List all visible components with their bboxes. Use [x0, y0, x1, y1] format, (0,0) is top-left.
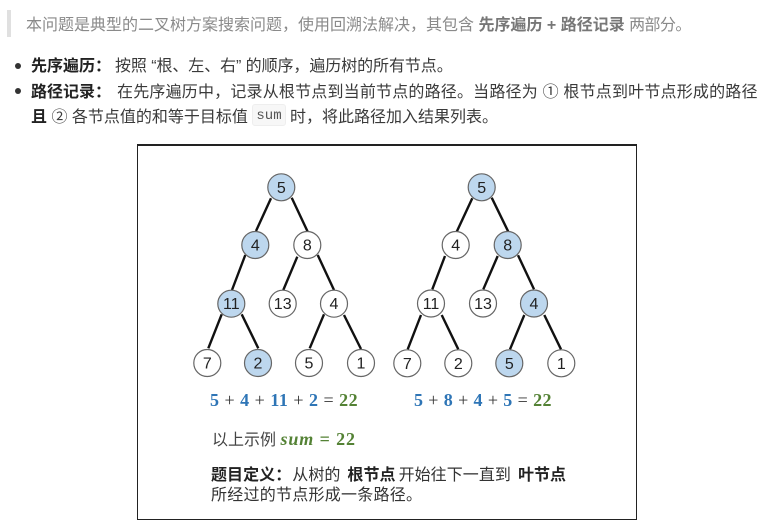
- bullet: preorder: 按照 “根、左、右” 的顺序，遍历树的所有节点。: [115, 58, 453, 75]
- quote bar: [7, 10, 11, 37]
- left tree: 13: [274, 296, 292, 313]
- right tree: 1: [557, 356, 566, 373]
- right tree: 4: [530, 296, 539, 313]
- left tree: 5: [305, 356, 314, 372]
- left tree: 2: [254, 356, 263, 372]
- equation right: 5 + 8 + 4 + 5 = 22: [414, 390, 552, 410]
- right tree: 7: [403, 356, 412, 373]
- right tree: 4: [451, 238, 460, 254]
- bullet: path record: sum: [256, 108, 282, 124]
- right tree: 8: [503, 238, 512, 254]
- definition: 题目定义：从树的 根节点开始往下一直到 叶节点: [211, 467, 566, 484]
- equation left: 5 + 4 + 11 + 2 = 22: [210, 390, 358, 410]
- definition: 所经过的节点形成一条路径。: [211, 487, 422, 504]
- right tree: 5: [477, 180, 486, 197]
- right tree: 5: [505, 356, 514, 373]
- right tree: 11: [423, 296, 439, 313]
- left tree: 4: [251, 238, 260, 254]
- left tree: 7: [203, 356, 212, 372]
- left tree: [194, 174, 374, 376]
- bullet: path record: 在先序遍历中，记录从根节点到当前节点的路径。当路径为 ① 根节点到叶节点形成的路径: [117, 84, 758, 101]
- left tree: 4: [330, 296, 339, 313]
- left tree: 1: [357, 356, 366, 372]
- bullet: path record: [15, 83, 758, 126]
- left tree: 8: [303, 238, 312, 254]
- left tree: 11: [223, 296, 240, 313]
- right tree: 13: [474, 296, 492, 313]
- right tree: [394, 174, 575, 377]
- sum example: 以上示例 sum = 22: [212, 429, 356, 449]
- bullet: path record: 且 ② 各节点值的和等于目标值: [31, 109, 248, 126]
- left tree: 5: [277, 180, 286, 197]
- definition: [211, 466, 566, 504]
- intro quote text: 本问题是典型的二叉树方案搜索问题，使用回溯法解决，其包含 先序遍历 + 路径记录 两部分。: [26, 17, 691, 34]
- diagram panel: [137, 144, 637, 520]
- bullet: preorder: 先序遍历：: [31, 58, 111, 75]
- bullet: path record: 路径记录：: [31, 84, 111, 101]
- right tree: 2: [454, 356, 463, 373]
- bullet: path record: 时，将此路径加入结果列表。: [290, 109, 498, 126]
